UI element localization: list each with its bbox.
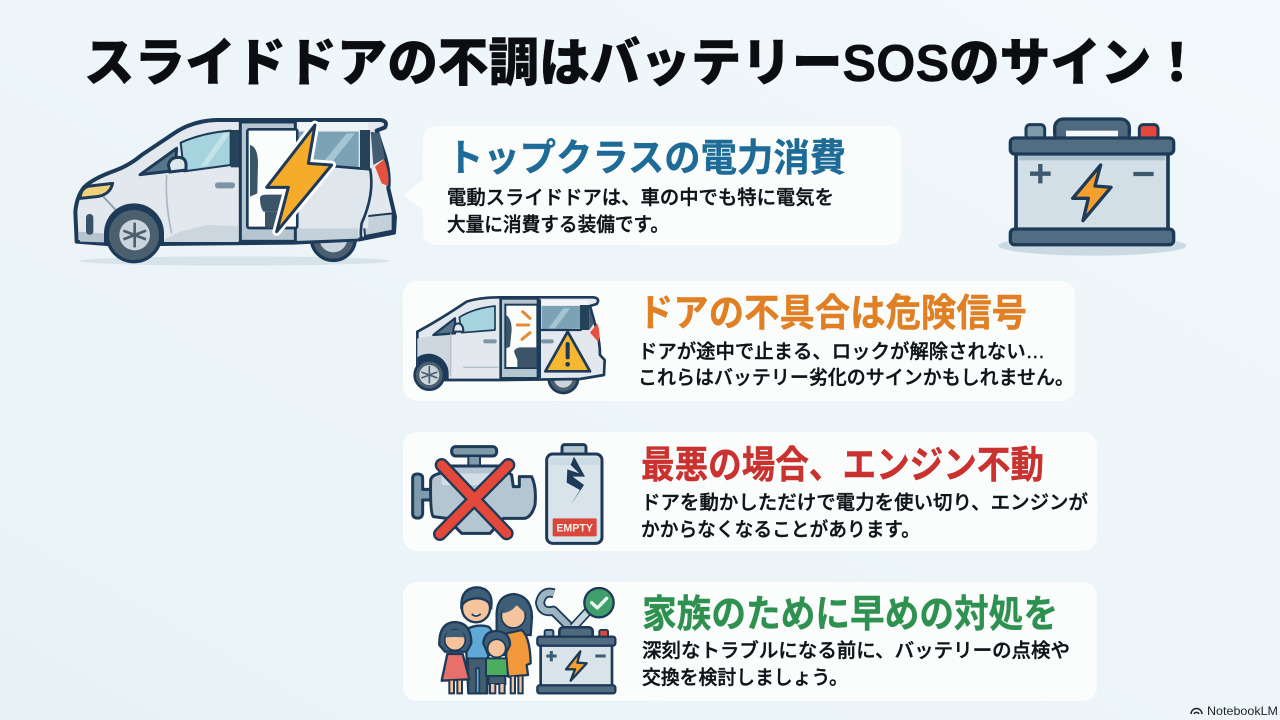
icon: van with warning triangle xyxy=(415,297,605,393)
body text xyxy=(638,341,1074,389)
heading: ドアの不具合は危険信号 xyxy=(638,293,1027,335)
body text: ドアを動かしただけで電力を使い切り、エンジンが xyxy=(641,492,1088,514)
panel: engine will not start xyxy=(403,432,1097,551)
body text: かからなくなることがあります。 xyxy=(641,519,920,541)
title: スライドドアの不調はバッテリーSOSのサイン！ xyxy=(84,35,1202,93)
panel: act early for family xyxy=(403,582,1097,701)
icon: crossed-out engine and empty battery xyxy=(413,445,602,543)
body text xyxy=(641,492,1088,541)
body text: 大量に消費する装備です。 xyxy=(447,214,669,236)
body text: これらはバッテリー劣化のサインかもしれません。 xyxy=(638,367,1074,389)
panel: top-class power consumption xyxy=(403,126,901,245)
panel: door trouble warning xyxy=(403,281,1075,401)
icon: family and battery service xyxy=(439,587,615,693)
icon: car battery xyxy=(998,119,1186,256)
body text xyxy=(642,639,1070,689)
heading: 家族のために早めの対処を xyxy=(642,594,1058,636)
body text xyxy=(447,187,834,236)
body text: 交換を検討しましょう。 xyxy=(642,667,848,689)
body text: ドアが途中で止まる、ロックが解除されない… xyxy=(638,341,1045,363)
label: empty: EMPTY xyxy=(556,522,593,534)
heading: 最悪の場合、エンジン不動 xyxy=(641,445,1044,487)
icon: van with lightning bolt xyxy=(75,120,395,266)
body text: 電動スライドドアは、車の中でも特に電気を xyxy=(447,187,834,209)
heading: トップクラスの電力消費 xyxy=(447,138,846,180)
watermark: NotebookLM: NotebookLM xyxy=(1207,704,1278,718)
body text: 深刻なトラブルになる前に、バッテリーの点検や xyxy=(642,639,1070,662)
